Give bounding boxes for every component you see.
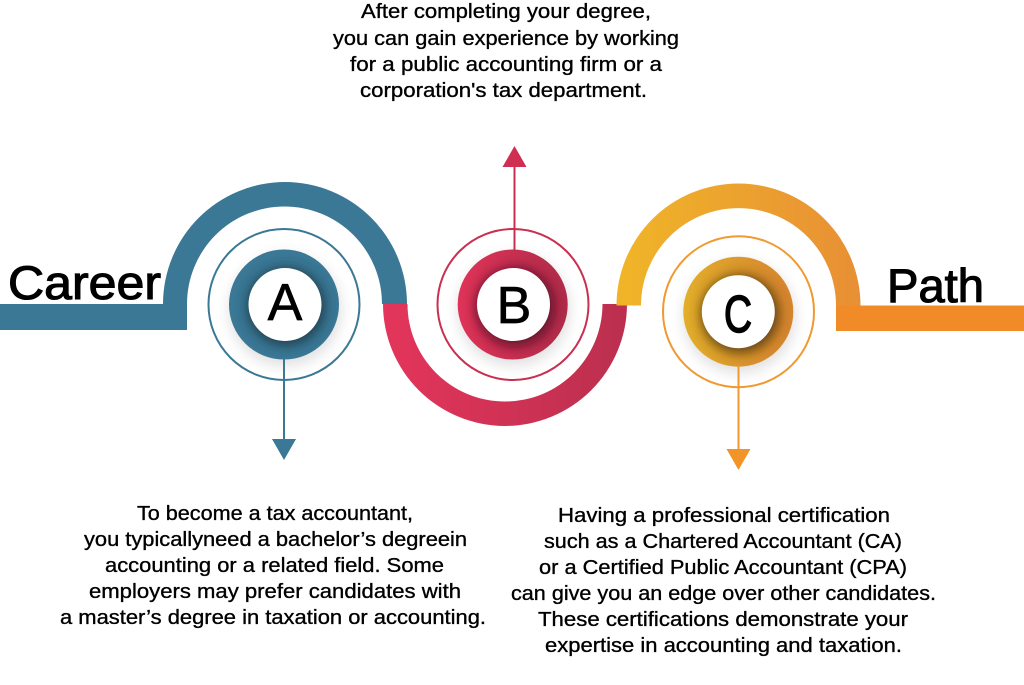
step C badge bbox=[663, 236, 814, 387]
text block: step C description: can give you an edge over other candidates. bbox=[511, 582, 936, 605]
step A badge bbox=[208, 229, 360, 380]
text block: step B description: you can gain experience by working bbox=[333, 27, 679, 50]
arrow down from A bbox=[272, 359, 296, 460]
text block: step B description: for a public accounting firm or a bbox=[350, 53, 663, 76]
text block: step C description: or a Certified Public Accountant (CPA) bbox=[539, 556, 907, 579]
blue bar and upper arc bbox=[0, 182, 407, 330]
text block: step A description: you typicallyneed a bachelor’s degreein bbox=[84, 528, 467, 551]
arrow up from B bbox=[502, 146, 526, 250]
text block: step B description bbox=[333, 0, 679, 102]
text block: step C description bbox=[511, 504, 936, 657]
text block: step A description: To become a tax accountant, bbox=[137, 502, 413, 525]
arrow down from C bbox=[726, 366, 750, 470]
text block: step A description: employers may prefer candidates with bbox=[89, 580, 461, 603]
text block: step B description: After completing your degree, bbox=[361, 0, 651, 23]
step B badge bbox=[438, 229, 588, 380]
orange bar bbox=[836, 306, 1024, 331]
text block: step A description: a master’s degree in taxation or accounting. bbox=[60, 606, 486, 629]
text block: step C description: Having a professional certification bbox=[558, 504, 890, 527]
letter C: C bbox=[724, 286, 752, 344]
text block: step B description: corporation's tax department. bbox=[360, 79, 647, 102]
text block: step C description: These certifications demonstrate your bbox=[538, 608, 908, 631]
letter A: A bbox=[268, 274, 303, 332]
title word: Path: Path bbox=[887, 259, 984, 312]
red lower arc bbox=[383, 304, 627, 426]
letter B: B bbox=[497, 277, 531, 335]
text block: step C description: expertise in accounting and taxation. bbox=[545, 634, 902, 657]
text block: step A description: accounting or a related field. Some bbox=[105, 554, 444, 577]
text block: step C description: such as a Chartered Accountant (CA) bbox=[544, 530, 902, 553]
text block: step A description bbox=[60, 502, 486, 629]
title word: Career: Career bbox=[8, 256, 161, 309]
yellow upper arc bbox=[616, 183, 860, 306]
